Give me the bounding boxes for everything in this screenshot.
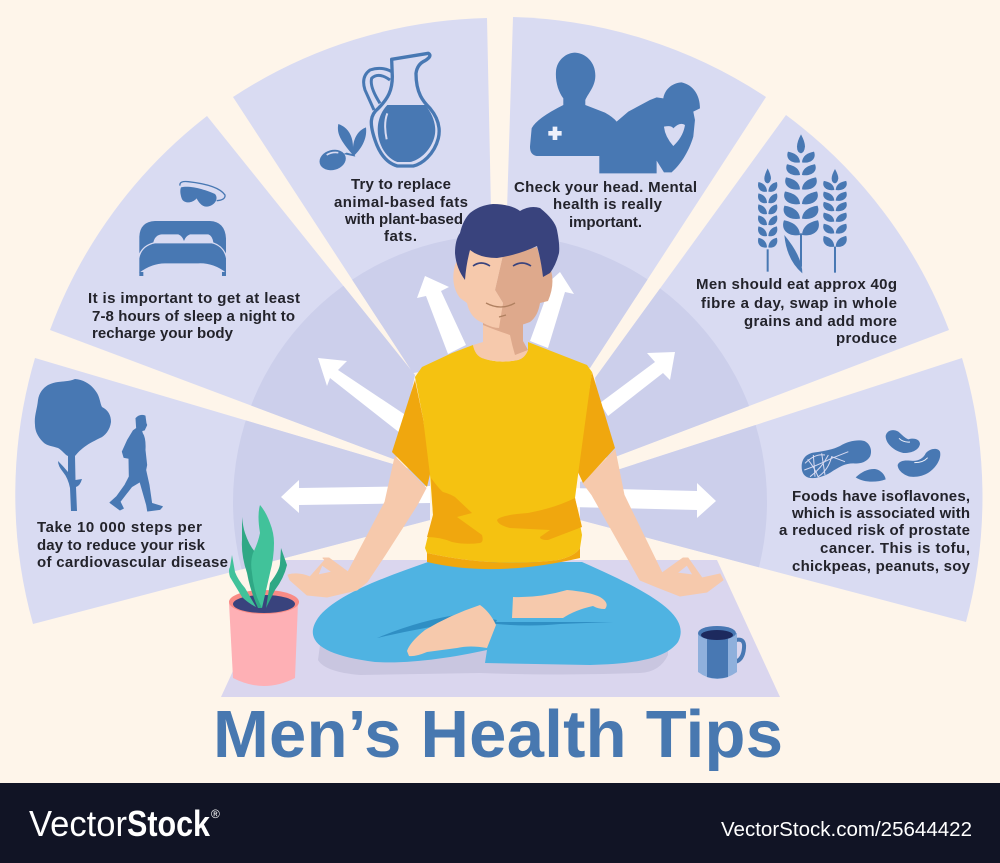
- text: fibre tip: produce: [836, 330, 897, 347]
- text: fats tip: animal-based fats: [334, 194, 468, 211]
- leaves: [242, 517, 287, 608]
- text: mental health tip: [514, 179, 697, 231]
- arrow: upper right: [600, 352, 675, 416]
- text: walking tip: day to reduce your risk: [37, 537, 206, 554]
- head: [453, 204, 559, 328]
- text: isoflavones tip: [779, 488, 971, 575]
- foot: right: [512, 590, 607, 618]
- face features: [473, 263, 531, 266]
- icon: olive branch: [317, 124, 366, 173]
- arrow: left: [281, 480, 430, 513]
- text: isoflavones tip: Foods have isoflavones,: [792, 488, 970, 505]
- panel: walking: [15, 358, 430, 624]
- yoga mat: [221, 560, 780, 697]
- text: fibre tip: Men should eat approx 40g: [696, 276, 897, 293]
- title: Men’s Health Tips: [213, 697, 783, 772]
- hair: [455, 204, 559, 280]
- footer url: VectorStock.com/25644422: [721, 819, 972, 841]
- footer logo: ®: [211, 807, 220, 821]
- panel: fibre: [595, 115, 949, 460]
- arrow: right: [570, 483, 716, 518]
- plant in pot: [229, 505, 299, 686]
- mat shadow: [318, 640, 668, 675]
- text: isoflavones tip: cancer. This is tofu,: [820, 540, 970, 557]
- person: [288, 204, 723, 665]
- text: walking tip: Take 10 000 steps per: [37, 519, 202, 536]
- text: isoflavones tip: which is associated with: [791, 505, 970, 522]
- text: isoflavones tip: a reduced risk of prostate: [779, 522, 970, 539]
- mug: [698, 626, 744, 679]
- panel: fats: [233, 18, 491, 373]
- icon: oil jug: [364, 53, 439, 166]
- icon: bed: [139, 221, 226, 276]
- neck: [473, 318, 528, 362]
- text: sleep tip: It is important to get at least: [88, 290, 300, 307]
- icon: tree: [35, 379, 111, 511]
- footer logo: [29, 803, 220, 844]
- text: mental health tip: health is really: [553, 196, 663, 213]
- text: sleep tip: 7-8 hours of sleep a night to: [92, 308, 295, 325]
- footer logo: Stock: [127, 803, 211, 844]
- pot: [229, 603, 298, 686]
- text: mental health tip: important.: [569, 214, 642, 231]
- arm: left with hand: [288, 457, 426, 597]
- footer bar: [0, 783, 1000, 863]
- arrow: up left: [417, 276, 466, 354]
- text: fibre tip: grains and add more: [744, 313, 897, 330]
- footer logo: Vector: [29, 803, 127, 844]
- text: walking tip: of cardiovascular disease: [37, 554, 228, 571]
- icon: peanuts and beans: [802, 430, 940, 482]
- text: isoflavones tip: chickpeas, peanuts, soy: [792, 558, 971, 575]
- panel: sleep: [50, 116, 415, 460]
- arm: right with hand: [583, 450, 723, 596]
- text: sleep tip: [88, 290, 300, 342]
- text: mental health tip: Check your head. Mental: [514, 179, 697, 196]
- inner ring: [233, 238, 767, 570]
- text: walking tip: [37, 519, 228, 571]
- panel: isoflavones: [580, 358, 982, 622]
- arrows: [281, 272, 716, 518]
- icon: walking man: [110, 415, 162, 511]
- arrow: upper left: [318, 358, 410, 433]
- shirt: [392, 342, 615, 569]
- icon: wheat stalks: [758, 134, 847, 273]
- text: sleep tip: recharge your body: [92, 325, 234, 342]
- pants: [313, 562, 681, 665]
- icon: sleep mask: [180, 181, 225, 207]
- arrow: up right: [530, 272, 574, 348]
- neck shadow: [483, 320, 528, 355]
- text: fats tip: [334, 176, 468, 245]
- panel: mental health: [507, 17, 766, 368]
- text: fats tip: fats.: [384, 228, 417, 245]
- text: fats tip: with plant-based: [344, 211, 463, 228]
- icon: doctor and distressed man: [530, 53, 700, 173]
- text: fats tip: Try to replace: [351, 176, 451, 193]
- foot: left: [407, 605, 496, 656]
- text: fibre tip: fibre a day, swap in whole: [701, 295, 897, 312]
- text: fibre tip: [696, 276, 897, 347]
